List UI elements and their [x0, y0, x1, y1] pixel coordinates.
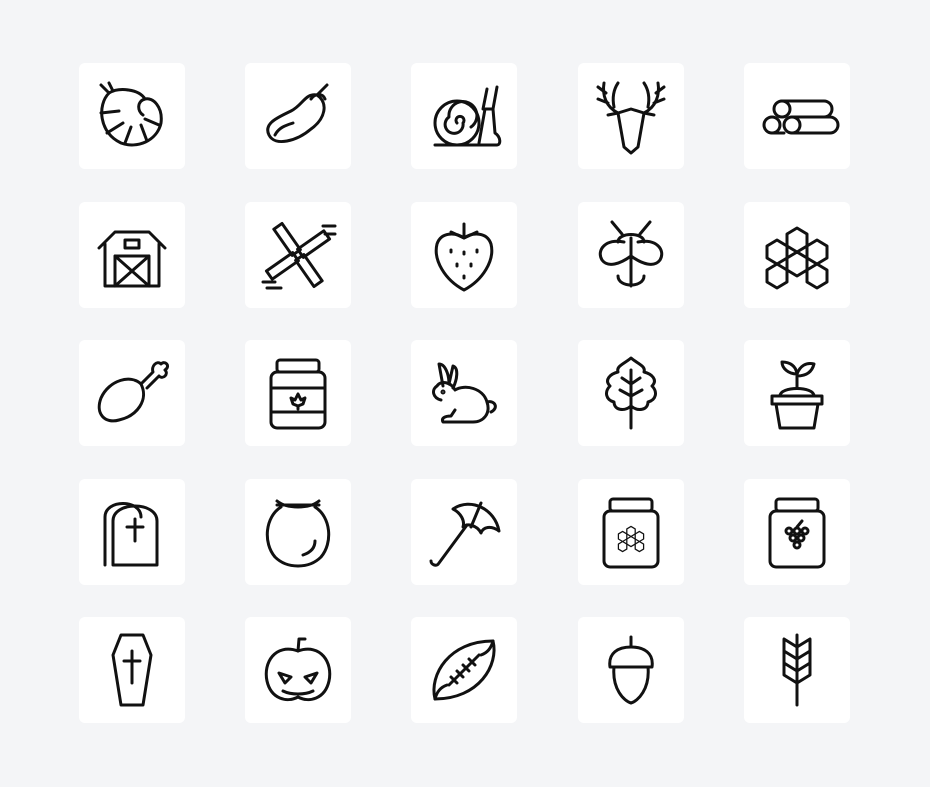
tile: honeycomb [744, 202, 850, 308]
tile: deer head [578, 63, 684, 169]
tile: strawberry [411, 202, 517, 308]
tile: bug [578, 202, 684, 308]
tile: football [411, 617, 517, 723]
tile: jar maple [245, 340, 351, 446]
tile: rabbit [411, 340, 517, 446]
tile: coffin [79, 617, 185, 723]
tile: leaf [578, 340, 684, 446]
tile: shrimp [79, 63, 185, 169]
tile: grape jar [744, 479, 850, 585]
tile: chicken leg [79, 340, 185, 446]
tile: umbrella [411, 479, 517, 585]
tile: barn [79, 202, 185, 308]
tile: wheat [744, 617, 850, 723]
tile: acorn [578, 617, 684, 723]
tile: eggplant [245, 63, 351, 169]
tile: pumpkin [245, 617, 351, 723]
tile: plant pot [744, 340, 850, 446]
tile: tombstone [79, 479, 185, 585]
tile: windmill [245, 202, 351, 308]
tile: snail [411, 63, 517, 169]
tile: fishbowl [245, 479, 351, 585]
tile: logs [744, 63, 850, 169]
tile: honey jar [578, 479, 684, 585]
